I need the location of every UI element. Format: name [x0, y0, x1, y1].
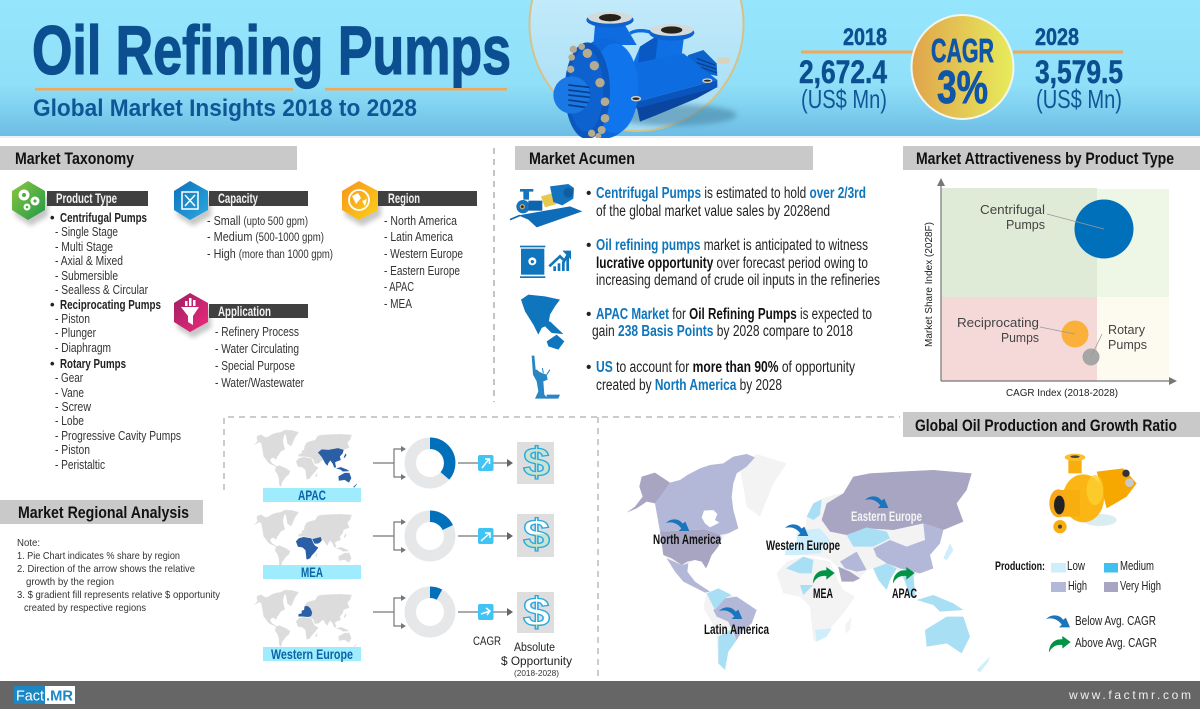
legend: production levels [995, 558, 1161, 593]
list: product types [50, 210, 181, 472]
list: product types: • [50, 297, 55, 312]
arrow: APAC [893, 567, 915, 584]
list: product types: • [50, 356, 55, 371]
list: product types: - Plunger [55, 325, 97, 340]
heading: market acumen: Market Acumen [529, 149, 635, 168]
list: product types: - Sealless & Circular [55, 282, 149, 297]
icon: statue of liberty [532, 356, 560, 399]
panel: market taxonomy [0, 146, 477, 472]
panel: market regional analysis note [0, 500, 221, 614]
list: product types: - Multi Stage [55, 239, 113, 254]
list: applications: - Water Circulating [215, 341, 299, 356]
list: product types: - Single Stage [55, 224, 118, 239]
icon: CAGR arrow up [458, 455, 513, 471]
captions: CAGR and absolute opportunity: (2018-2028) [514, 669, 559, 678]
icon: dollar opportunity [517, 589, 554, 635]
captions: CAGR and absolute opportunity: Absolute [514, 642, 555, 654]
icon: capacity hexagon [174, 181, 211, 226]
arrow: North America [666, 519, 689, 531]
arrow: Latin America [719, 607, 742, 619]
bubble chart: Pumps [1001, 331, 1039, 345]
panel: global oil production [627, 412, 1200, 672]
text: centrifugal pumps insight: of the global market value sales by 2028end [596, 203, 830, 220]
captions: CAGR and absolute opportunity [473, 636, 572, 678]
list: product types: Centrifugal Pumps [60, 210, 147, 225]
list: product types: - Vane [55, 385, 84, 400]
label: North America: North America [653, 531, 721, 547]
icon: dollar opportunity: $ [523, 511, 550, 557]
list: regions: - Latin America [384, 229, 454, 244]
stat: 2028 market value: 3,579.5 [1035, 54, 1123, 90]
legend: production levels: Production: [995, 559, 1045, 573]
icon: dollar opportunity [517, 439, 554, 485]
legend: production levels: Low [1067, 558, 1085, 573]
main title: Oil Refining Pumps [32, 12, 511, 89]
label: Western Europe: Western Europe [271, 646, 353, 662]
header banner [0, 0, 1200, 138]
list: product types: - Submersible [55, 268, 118, 283]
bubble chart: CAGR Index (2018-2028) [1006, 388, 1118, 399]
heading: market regional analysis [0, 500, 203, 524]
stat: 2018 market value: (US$ Mn) [801, 84, 887, 114]
icon: CAGR arrow up [458, 528, 513, 544]
label: product type: Product Type [56, 190, 117, 206]
list: regions: - Eastern Europe [384, 263, 460, 278]
logo: Fact.MR: Fact [16, 688, 44, 704]
text: notes: created by respective regions [24, 602, 146, 614]
text: APAC insight: • [586, 306, 591, 323]
text: market opportunity insight: • [586, 237, 591, 254]
website url: www.factmr.com [1068, 688, 1191, 702]
donut chart: APAC share [410, 443, 450, 483]
bubble chart: Rotary [1108, 323, 1146, 337]
map: Western Europe [253, 590, 357, 648]
text: US insight: • [586, 359, 591, 376]
captions: CAGR and absolute opportunity: CAGR [473, 636, 501, 648]
pump hero image [530, 0, 744, 139]
icon: APAC map [521, 295, 564, 350]
arrow: Western Europe [785, 524, 808, 536]
text: notes: 3. $ gradient fill represents relative $ opportunity [17, 589, 221, 601]
text: APAC insight: gain 238 Basis Points by 2028 compare to 2018 [592, 323, 853, 340]
text: market opportunity insight: lucrative opportunity over forecast period owing to [596, 255, 868, 272]
list: product types: - Axial & Mixed [55, 253, 123, 268]
label: capacity: Capacity [218, 190, 258, 206]
text: notes: Note: [17, 537, 40, 549]
arrow: Eastern Europe [865, 496, 888, 508]
label: Eastern Europe: Eastern Europe [851, 508, 922, 524]
label: Latin America: Latin America [704, 621, 769, 637]
map: MEA [253, 510, 357, 568]
text: US insight: created by North America by 2028 [596, 377, 782, 394]
connector [373, 595, 406, 629]
list: product types: - Lobe [55, 413, 84, 428]
panel: market attractiveness [903, 146, 1200, 399]
legend: production levels: High [1068, 578, 1087, 593]
text: centrifugal pumps insight: Centrifugal Pumps is estimated to hold over 2/3rd [596, 185, 866, 202]
regional row: APAC [253, 430, 554, 503]
icon: region hexagon [342, 181, 381, 226]
list: capacity: - Small (upto 500 gpm) [207, 213, 308, 228]
list: regions: - MEA [384, 296, 412, 311]
dashed frame [224, 417, 900, 680]
arrow: MEA [813, 567, 835, 584]
text: notes: 1. Pie Chart indicates % share by region [17, 550, 180, 562]
legend: production levels: Very High [1120, 578, 1161, 593]
footer bar [0, 681, 1200, 709]
legend: CAGR arrows: Below Avg. CAGR [1075, 613, 1156, 628]
label: application: Application [218, 303, 271, 319]
bubble chart: Pumps [1108, 338, 1147, 352]
text: notes: growth by the region [26, 576, 114, 588]
list: applications: - Water/Wastewater [215, 375, 305, 390]
bubble chart: Centrifugal [980, 203, 1045, 217]
list: product types: - Piston [55, 442, 90, 457]
icon: dollar opportunity [517, 511, 554, 557]
list: regions: - Western Europe [384, 246, 463, 261]
label: MEA: MEA [301, 564, 323, 580]
text: market opportunity insight: Oil refining pumps market is anticipated to witness [596, 237, 868, 254]
world map [627, 454, 990, 672]
bubble chart [924, 178, 1177, 399]
text: centrifugal pumps insight: • [586, 185, 591, 202]
stat: 2018 market value: 2,672.4 [799, 54, 887, 90]
list: product types: - Piston [55, 311, 90, 326]
heading: market regional analysis: Market Regional Analysis [18, 503, 189, 522]
icon: dollar opportunity: $ [523, 589, 550, 635]
regional row: MEA [253, 510, 554, 580]
CAGR badge [912, 15, 1014, 119]
list: product types: - Progressive Cavity Pumps [55, 428, 181, 443]
donut chart: MEA share [410, 516, 450, 556]
map: APAC [253, 430, 357, 488]
label: MEA [263, 564, 361, 580]
heading: market acumen [515, 146, 813, 170]
icon: application hexagon [174, 293, 211, 338]
legend: CAGR arrows [1046, 613, 1157, 653]
title underline [35, 88, 507, 90]
stat: 2028 market value: 2028 [1035, 24, 1079, 51]
list: applications: - Refinery Process [215, 324, 299, 339]
section divider [493, 148, 495, 402]
text: US insight: US to account for more than 90% of opportunity [596, 359, 855, 376]
CAGR badge: CAGR [931, 32, 994, 69]
icon: CAGR arrow flat [458, 604, 513, 620]
label: region: Region [388, 190, 420, 206]
legend: production levels: Medium [1120, 558, 1154, 573]
subtitle: Global Market Insights 2018 to 2028 [33, 95, 417, 122]
list: applications [215, 324, 305, 390]
text: APAC insight: APAC Market for Oil Refining Pumps is expected to [596, 306, 872, 323]
label: APAC [263, 487, 361, 503]
list: product types: - Diaphragm [55, 340, 111, 355]
bubble chart: Market Share Index (2028F) [924, 222, 935, 347]
text: market opportunity insight [586, 237, 880, 289]
text: notes [17, 537, 221, 614]
heading: market taxonomy [0, 146, 297, 170]
icon: oil barrel and rising chart [520, 246, 571, 278]
list: product types: • [50, 210, 55, 225]
heading: market taxonomy: Market Taxonomy [15, 149, 134, 168]
image: yellow pump [1049, 454, 1137, 533]
bubble chart: Reciprocating [957, 316, 1039, 330]
icon: centrifugal pump [510, 184, 582, 227]
list: regions [384, 213, 463, 311]
stat: 2028 market value: (US$ Mn) [1036, 84, 1122, 114]
label: APAC: APAC [892, 585, 917, 601]
list: product types: - Screw [55, 399, 91, 414]
list: product types: - Gear [55, 370, 84, 385]
stat: 2018 market value: 2018 [843, 24, 887, 51]
icon: gears hexagon [12, 181, 48, 226]
captions: CAGR and absolute opportunity: $ Opportunity [501, 656, 572, 668]
text: US insight [586, 359, 855, 394]
list: product types: - Peristaltic [55, 457, 105, 472]
icon: dollar opportunity: $ [523, 439, 550, 485]
list: regions: - APAC [384, 279, 414, 294]
label: Western Europe: Western Europe [766, 537, 840, 553]
text: centrifugal pumps insight [586, 185, 866, 220]
connector [373, 446, 406, 480]
list: capacity: - Medium (500-1000 gpm) [207, 229, 324, 244]
label: capacity [209, 190, 308, 206]
text: APAC insight [586, 306, 872, 340]
stat: 2028 market value [1013, 24, 1123, 114]
legend: CAGR arrows: Above Avg. CAGR [1075, 635, 1157, 650]
logo: Fact.MR: .MR [46, 688, 74, 704]
bubble chart: Pumps [1006, 218, 1045, 232]
logo: Fact.MR [14, 686, 75, 704]
list: product types: Rotary Pumps [60, 356, 126, 371]
CAGR badge: 3% [937, 61, 988, 113]
donut chart: Western Europe share [410, 592, 450, 632]
text: market opportunity insight: increasing demand of crude oil inputs in the refineries [596, 272, 880, 289]
connector [373, 519, 406, 553]
list: capacity [207, 213, 333, 261]
stat: 2018 market value [799, 24, 913, 114]
label: region [378, 190, 477, 206]
list: product types: Reciprocating Pumps [60, 297, 161, 312]
label: MEA: MEA [813, 585, 833, 601]
list: applications: - Special Purpose [215, 358, 295, 373]
list: capacity: - High (more than 1000 gpm) [207, 246, 333, 261]
regional row: Western Europe [253, 589, 554, 662]
panel: market acumen [510, 146, 880, 399]
label: APAC: APAC [298, 487, 326, 503]
list: regions: - North America [384, 213, 458, 228]
text: notes: 2. Direction of the arrow shows the relative [17, 563, 195, 575]
